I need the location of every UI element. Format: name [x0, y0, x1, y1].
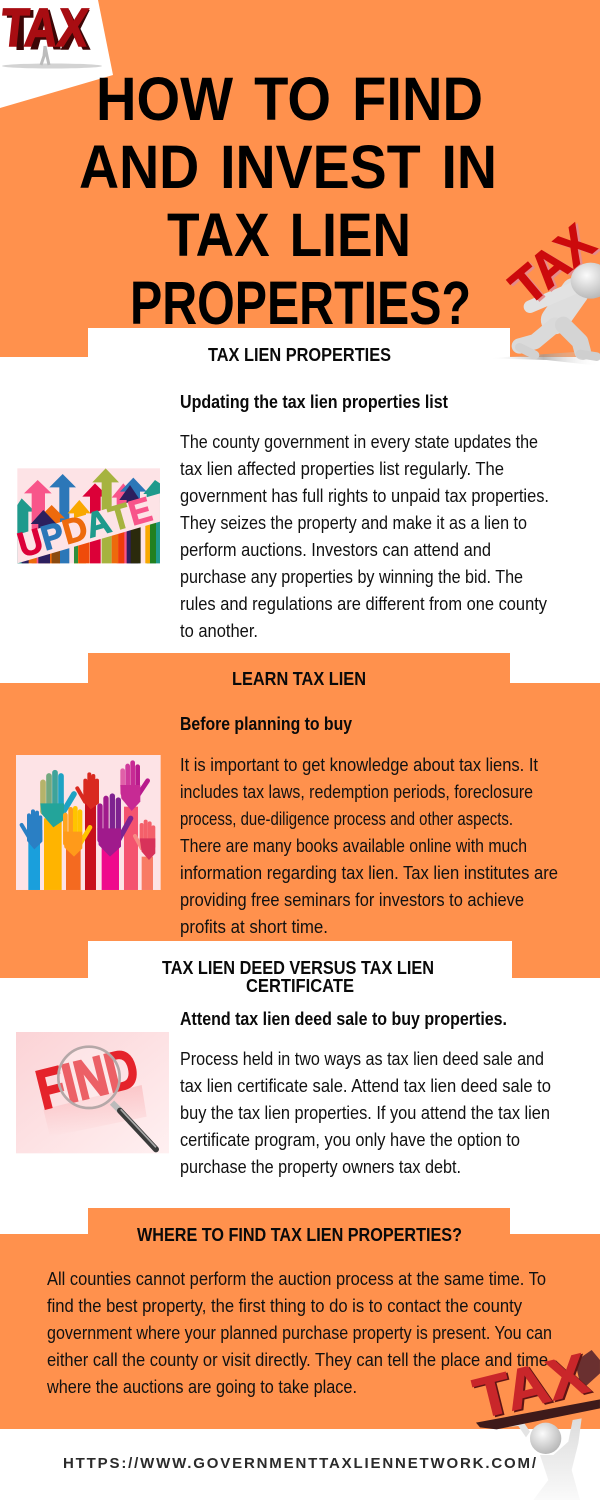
icon: figure lifting tax: TAX [468, 1342, 595, 1431]
body text: update: to another. [180, 621, 258, 641]
body text: where to find: government where your planned purchase property is present. You can [47, 1323, 552, 1343]
body text: learn tax lien: providing free seminars for investors to achieve [180, 890, 524, 910]
body text: learn tax lien: process, due-diligence process and other aspects. [180, 809, 513, 829]
body text: deed versus certificate: certificate program, you only have the option to [180, 1130, 520, 1150]
body text: deed versus certificate [180, 1049, 551, 1177]
image: update arrows: UPDATE [14, 491, 156, 565]
body text: deed versus certificate: tax lien certificate sale. Attend tax lien deed sale to [180, 1076, 551, 1096]
body text: update: tax lien affected properties list regularly. The [180, 459, 504, 479]
body text: update: rules and regulations are different from one county [180, 594, 547, 614]
footer url: HTTPS://WWW.GOVERNMENTTAXLIENNETWORK.COM/ [63, 1455, 537, 1472]
icon: tax badge top left [0, 0, 113, 108]
body text: learn tax lien: There are many books available online with much [180, 836, 527, 856]
body text: where to find: where the auctions are going to take place. [46, 1377, 357, 1397]
subheading: attend deed sale: Attend tax lien deed sale to buy properties. [180, 1009, 507, 1029]
body text: update [180, 432, 549, 641]
body text: learn tax lien [180, 755, 558, 937]
body text: update: purchase any properties by winning the bid. The [180, 567, 523, 587]
icon: figure lifting tax [468, 1342, 600, 1500]
body text: where to find [46, 1269, 552, 1397]
title: TAX LIEN [167, 201, 411, 269]
heading: tax lien properties: TAX LIEN PROPERTIES [208, 345, 391, 365]
title: HOW TO FIND [96, 65, 483, 133]
image: raised hands [16, 755, 161, 890]
image: find magnifier: FIND [31, 1036, 144, 1121]
body text: deed versus certificate: purchase the property owners tax debt. [180, 1157, 461, 1177]
heading: deed versus certificate: CERTIFICATE [246, 976, 354, 996]
body text: update: government has full rights to unpaid tax properties. [180, 486, 549, 506]
icon: figure carrying tax [487, 214, 600, 366]
body text: update: The county government in every state updates the [180, 432, 538, 452]
title [79, 65, 497, 337]
panel: learn tax lien background [0, 653, 600, 979]
body text: learn tax lien: profits at short time. [180, 917, 328, 937]
heading: deed versus certificate: TAX LIEN DEED VERSUS TAX LIEN [162, 958, 434, 978]
subheading: updating the list: Updating the tax lien properties list [180, 392, 448, 412]
body text: where to find: either call the county or visit directly. They can tell the place and time [47, 1350, 548, 1370]
title: PROPERTIES? [130, 269, 471, 337]
body text: learn tax lien: It is important to get knowledge about tax liens. It [180, 755, 538, 775]
panel: header background [0, 0, 600, 368]
body text: update: perform auctions. Investors can attend and [180, 540, 491, 560]
body text: where to find: find the best property, the first thing to do is to contact the county [47, 1296, 522, 1316]
heading: where to find: WHERE TO FIND TAX LIEN PROPERTIES? [137, 1225, 462, 1245]
body text: deed versus certificate: Process held in two ways as tax lien deed sale and [180, 1049, 544, 1069]
body text: learn tax lien: information regarding tax lien. Tax lien institutes are [180, 863, 558, 883]
title: AND INVEST IN [79, 133, 497, 201]
heading: learn tax lien: LEARN TAX LIEN [232, 669, 366, 689]
body text: where to find: All counties cannot perform the auction process at the same time. To [47, 1269, 546, 1289]
icon: figure lifting tax: TAX [470, 1343, 597, 1433]
heading: deed versus certificate [162, 958, 434, 996]
subheading: before planning: Before planning to buy [180, 714, 352, 734]
body text: update: They seizes the property and make it as a lien to [180, 513, 527, 533]
body text: learn tax lien: includes tax laws, redemption periods, foreclosure [180, 782, 533, 802]
body text: deed versus certificate: buy the tax lien properties. If you attend the tax lien [180, 1103, 550, 1123]
image: find magnifier [16, 1032, 169, 1153]
panel: where to find background [0, 1208, 600, 1429]
